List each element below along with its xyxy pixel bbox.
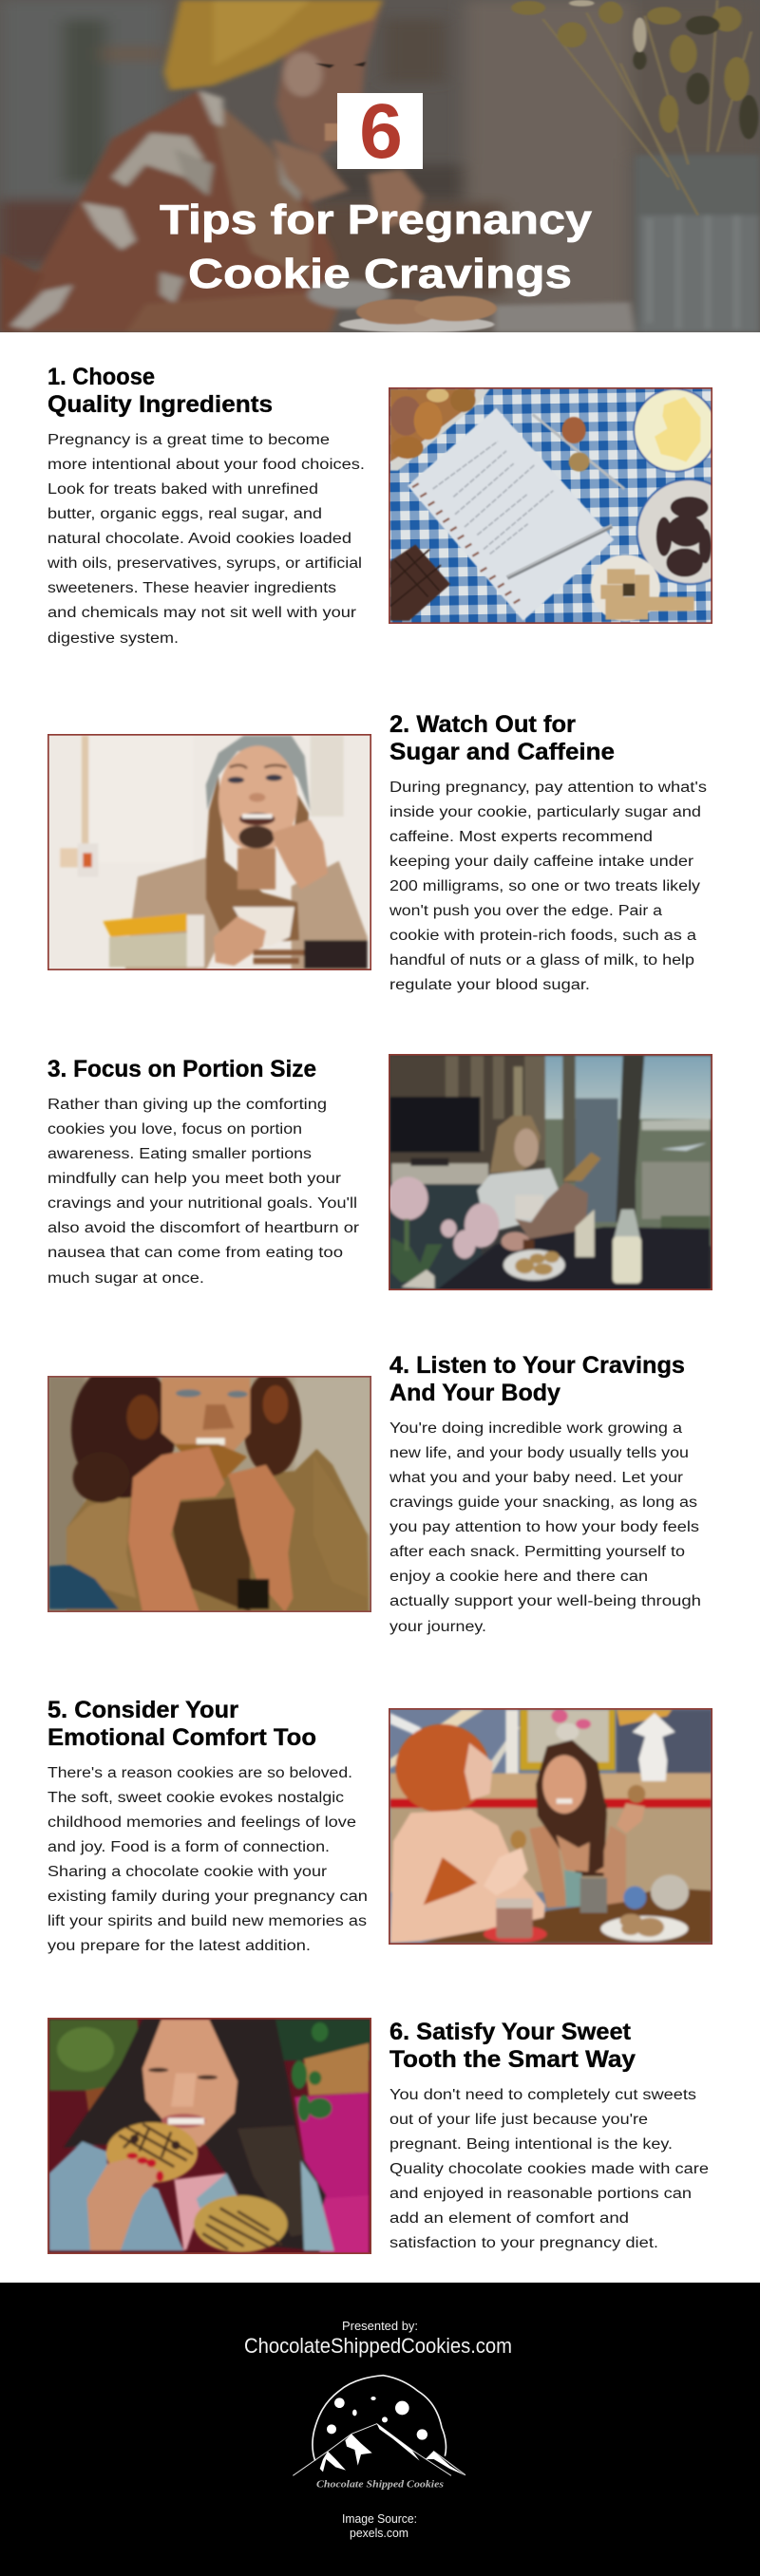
forearm [126, 292, 339, 332]
presented by credit: Presented by: [342, 2319, 418, 2333]
body text: tip 1 [47, 432, 365, 647]
chest [208, 95, 311, 278]
heading: tip 6 [390, 2019, 636, 2073]
heading: tip 6: 6. Satisfy Your Sweet [390, 2019, 632, 2045]
panel: tip 5 [48, 1697, 712, 1954]
body text: tip 6: out of your life just because you're [390, 2112, 648, 2128]
photo: woman in beanie biting a cookie [48, 734, 371, 970]
body text: tip 4: your journey. [390, 1619, 486, 1635]
heading: tip 4: 4. Listen to Your Cravings [390, 1352, 685, 1379]
body text: tip 5: and joy. Food is a form of connection. [48, 1839, 330, 1855]
heading: tip 2 [390, 711, 615, 765]
heading: tip 2: 2. Watch Out for [390, 711, 576, 738]
neck [272, 140, 349, 202]
body text: tip 2: handful of nuts or a glass of milk, to help [390, 952, 694, 968]
photo: two friends laughing at a cafe table [389, 1708, 712, 1945]
heading: tip 3: 3. Focus on Portion Size [48, 1056, 316, 1082]
panel: tip 1 [47, 364, 742, 647]
panel: tip 4 [48, 1352, 701, 1635]
panel: footer [0, 2283, 760, 2576]
body text: tip 5: existing family during your pregnancy can [48, 1889, 368, 1905]
heading: tip 1: 1. Choose [48, 364, 155, 390]
body text: tip 6: You don't need to completely cut sweets [390, 2087, 696, 2103]
body text: tip 3: awareness. Eating smaller portions [48, 1146, 312, 1162]
body text: tip 3: cravings and your nutritional goals. You'll [48, 1195, 357, 1212]
heading: tip 5: 5. Consider Your [48, 1697, 238, 1723]
body text: tip 3: nausea that can come from eating too [48, 1245, 343, 1261]
body text: tip 4: enjoy a cookie here and there can [390, 1569, 648, 1585]
title: Tips for Pregnancy [160, 197, 593, 243]
body text: tip 6 [390, 2087, 709, 2251]
body text: tip 3: much sugar at once. [48, 1270, 204, 1287]
heading: tip 2: Sugar and Caffeine [390, 739, 615, 765]
body text: tip 1: more intentional about your food choices. [48, 457, 365, 473]
body text: tip 2: regulate your blood sugar. [390, 977, 590, 993]
image source credit: Image Source: [342, 2511, 417, 2526]
photo: baking ingredients flat lay [389, 387, 712, 624]
logo: cookie and mountains: Chocolate Shipped Cookies [316, 2478, 444, 2490]
body text: tip 2: keeping your daily caffeine intake under [390, 854, 694, 870]
body text: tip 6: and enjoyed in reasonable portions can [390, 2186, 692, 2202]
body text: tip 3: also avoid the discomfort of heartburn or [48, 1220, 359, 1236]
body text: tip 4: what you and your baby need. Let your [389, 1470, 683, 1486]
body text: tip 1: digestive system. [48, 630, 179, 647]
logo: cookie and mountains [293, 2376, 466, 2490]
body text: tip 1: butter, organic eggs, real sugar, and [48, 506, 322, 522]
heading: tip 4: And Your Body [390, 1380, 560, 1406]
body text: tip 1: Pregnancy is a great time to become [48, 432, 330, 448]
body text: tip 1: sweeteners. These heavier ingredients [48, 580, 336, 596]
heading: tip 4 [390, 1352, 685, 1406]
body text: tip 5: Sharing a chocolate cookie with your [48, 1864, 327, 1880]
body text: tip 4: new life, and your body usually tells you [390, 1445, 689, 1461]
body text: tip 2: cookie with protein-rich foods, such as a [390, 928, 696, 944]
body text: tip 6: Quality chocolate cookies made with care [390, 2161, 709, 2177]
turban [163, 0, 383, 90]
panel: tip 3 [48, 1054, 712, 1290]
number badge: 6 [359, 88, 403, 175]
body text: tip 4 [389, 1420, 701, 1635]
body text: tip 1: and chemicals may not sit well with your [48, 605, 356, 621]
heading: tip 5: Emotional Comfort Too [48, 1724, 316, 1751]
hero photo: woman eating a cookie [0, 0, 760, 332]
body text: tip 4: You're doing incredible work growing a [390, 1420, 682, 1437]
body text: tip 5: you prepare for the latest addition. [48, 1938, 311, 1954]
image source credit: pexels.com [350, 2526, 408, 2540]
body text: tip 1: natural chocolate. Avoid cookies loaded [48, 531, 352, 547]
face [276, 0, 383, 155]
body text: tip 2: 200 milligrams, so one or two treats likely [390, 878, 700, 894]
body text: tip 5: The soft, sweet cookie evokes nostalgic [48, 1790, 344, 1806]
body text: tip 2: inside your cookie, particularly sugar and [390, 804, 701, 820]
presented by credit [244, 2319, 512, 2358]
body text: tip 4: actually support your well-being through [390, 1593, 701, 1609]
presented by credit: ChocolateShippedCookies.com [244, 2334, 512, 2358]
body text: tip 5: lift your spirits and build new memories as [48, 1913, 367, 1929]
dried flowers [542, 0, 751, 216]
vase and table [494, 302, 635, 332]
heading: tip 6: Tooth the Smart Way [390, 2046, 636, 2073]
heading: tip 1 [48, 364, 273, 418]
robe [0, 90, 339, 332]
body text: tip 6: add an element of comfort and [390, 2210, 629, 2227]
body text: tip 2: During pregnancy, pay attention to what's [390, 780, 707, 796]
heading: tip 1: Quality Ingredients [48, 391, 273, 418]
heading: tip 5 [48, 1697, 316, 1751]
body text: tip 1: Look for treats baked with unrefined [48, 481, 318, 498]
body text: tip 3: Rather than giving up the comforting [48, 1097, 327, 1113]
body text: tip 2: won't push you over the edge. Pair a [389, 903, 662, 919]
panel: tip 6 [48, 2018, 709, 2254]
body text: tip 3: mindfully can help you meet both your [48, 1171, 341, 1187]
body text: tip 5: childhood memories and feelings of love [48, 1814, 356, 1831]
image source credit [342, 2511, 417, 2540]
photo: woman holding two drizzled cookies [48, 2018, 371, 2254]
body text: tip 6: satisfaction to your pregnancy diet. [390, 2235, 658, 2251]
hand [369, 169, 424, 228]
title [160, 197, 593, 297]
plate and cookies [339, 316, 494, 332]
panel: hero header [0, 0, 760, 332]
body text: tip 2 [389, 780, 707, 993]
body text: tip 4: you pay attention to how your body feels [390, 1519, 699, 1535]
body text: tip 4: cravings guide your snacking, as long as [390, 1495, 697, 1511]
body text: tip 5: There's a reason cookies are so beloved. [48, 1765, 352, 1781]
number badge [337, 88, 423, 175]
photo: woman reading by a high-rise window [389, 1054, 712, 1290]
body text: tip 6: pregnant. Being intentional is the key. [390, 2136, 673, 2153]
body text: tip 5 [48, 1765, 368, 1954]
photo: curly-haired woman eating a cookie [48, 1376, 371, 1612]
body text: tip 3: cookies you love, focus on portion [48, 1121, 302, 1138]
body text: tip 3 [48, 1097, 359, 1287]
crane patches [111, 133, 203, 187]
title: Cookie Cravings [188, 251, 572, 297]
panel: tip 2 [48, 711, 707, 993]
body text: tip 2: caffeine. Most experts recommend [390, 829, 653, 845]
body text: tip 1: with oils, preservatives, syrups, or artificial [47, 555, 362, 572]
body text: tip 4: after each snack. Permitting yourself to [390, 1544, 685, 1560]
